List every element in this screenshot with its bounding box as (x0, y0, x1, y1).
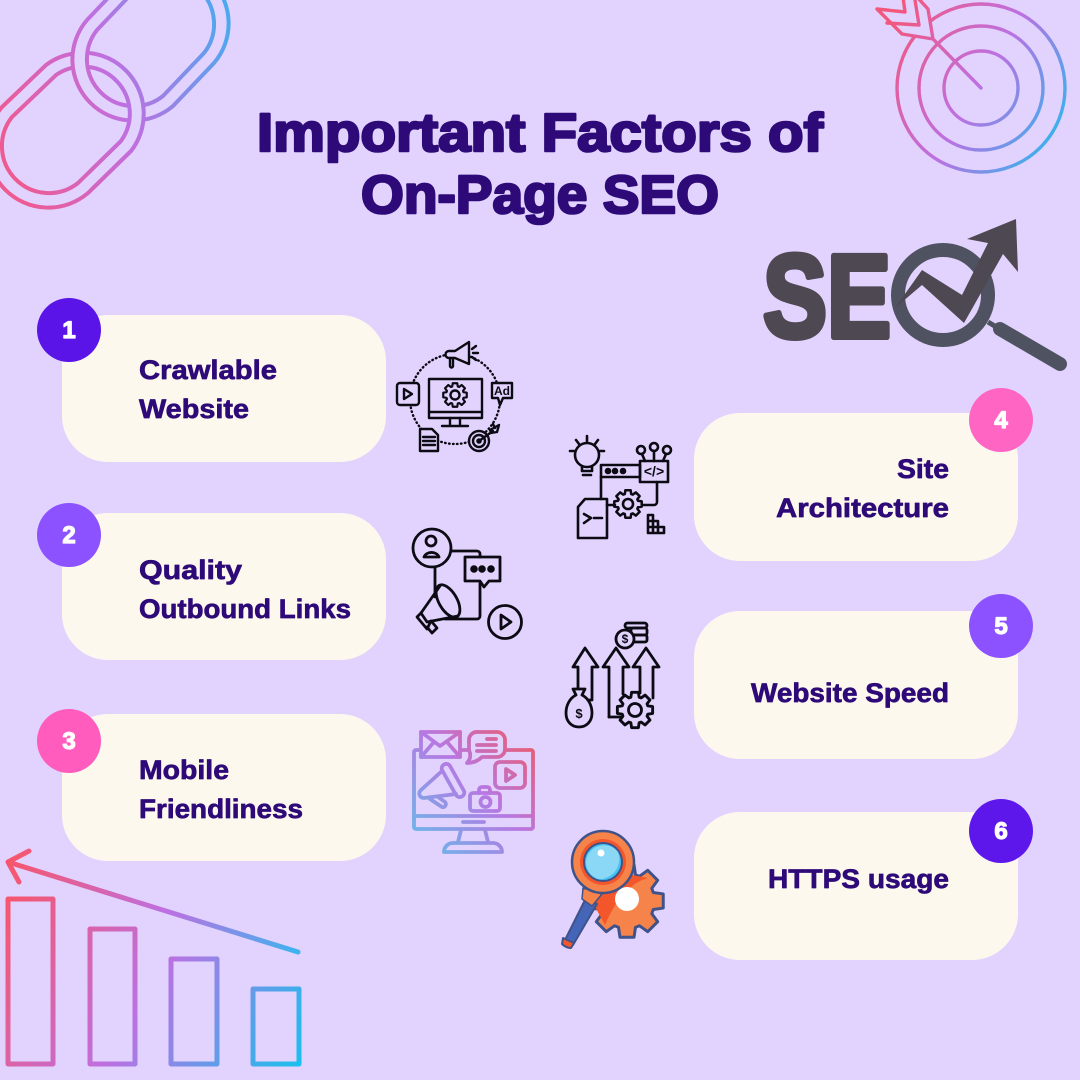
bar 1 (8, 899, 53, 1064)
panel: factor 2 Quality Outbound Links (37, 503, 386, 660)
label 3: Mobile (139, 755, 229, 785)
label 1: Website (139, 394, 249, 424)
label 2 (139, 555, 351, 624)
label 3: Friendliness (139, 794, 303, 824)
title: Important Factors of (257, 103, 824, 163)
bar 3 (171, 959, 217, 1064)
icon: outbound links person and megaphone (413, 529, 522, 638)
label 2: Quality (139, 555, 242, 585)
bar 4 (253, 989, 299, 1064)
label 1 (139, 355, 277, 424)
badge 4 (969, 388, 1033, 452)
icon: website speed growth arrows (566, 623, 659, 728)
icon: HTTPS usage magnifier and gear (562, 831, 663, 948)
icon: SEO logo with magnifier (763, 219, 1060, 364)
badge 6 (969, 799, 1033, 863)
label 5: Website Speed (751, 678, 949, 708)
icon: site architecture: </> (644, 463, 664, 479)
badge 2: 2 (62, 522, 76, 549)
badge 2 (37, 503, 101, 567)
label 2: Outbound Links (139, 594, 351, 624)
panel: factor 4 Site Architecture (694, 388, 1033, 561)
icon: crawlable website monitor cycle (397, 342, 512, 451)
icon: crawlable website monitor cycle: Ad (494, 384, 510, 398)
title: On-Page SEO (361, 165, 719, 225)
badge 3: 3 (62, 728, 76, 755)
label 4 (776, 454, 949, 523)
label 4: Architecture (776, 493, 949, 523)
bar 2 (90, 929, 135, 1064)
label 4: Site (897, 454, 949, 484)
icon: site architecture (570, 436, 671, 538)
label 1: Crawlable (139, 355, 277, 385)
badge 5 (969, 594, 1033, 658)
icon: mobile friendliness gradient monitor (414, 732, 533, 852)
chart: declining bars with arrow (8, 851, 299, 1064)
badge 1 (37, 298, 101, 362)
label 3 (139, 755, 303, 824)
panel: factor 1 Crawlable Website (37, 298, 386, 462)
icon: website speed growth arrows: $ (622, 632, 629, 646)
badge 6: 6 (994, 818, 1008, 845)
badge 4: 4 (994, 407, 1008, 434)
badge 5: 5 (994, 613, 1008, 640)
panel: factor 3 Mobile Friendliness (37, 709, 386, 861)
icon: SEO logo with magnifier: SE (763, 231, 891, 363)
icon: target with arrow (877, 0, 1065, 172)
label 6: HTTPS usage (768, 864, 949, 894)
arrow: downward trend (8, 851, 298, 952)
badge 1: 1 (62, 317, 76, 344)
icon: chain links (0, 0, 229, 208)
panel: factor 6 HTTPS usage (694, 799, 1033, 960)
title (257, 103, 824, 225)
icon: website speed growth arrows: $ (575, 706, 583, 721)
badge 3 (37, 709, 101, 773)
panel: factor 5 Website Speed (694, 594, 1033, 759)
